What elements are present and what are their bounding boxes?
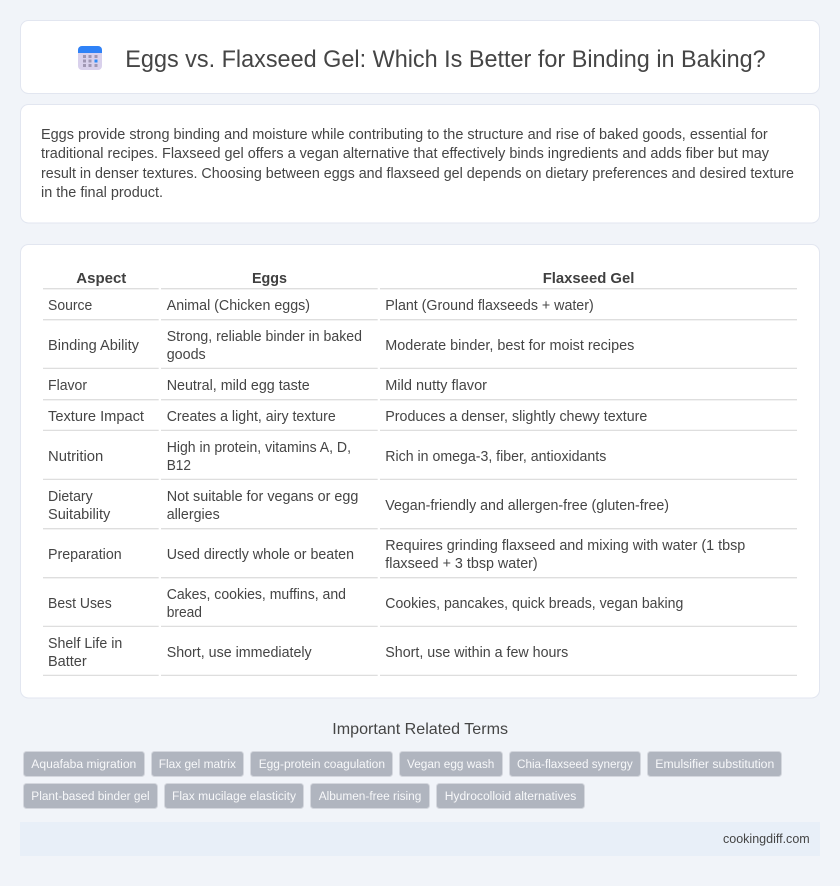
row: binding ability: Strong, reliable binder in baked — [167, 329, 362, 345]
chip: aquafaba migration — [24, 752, 144, 776]
row: flavor: Mild nutty flavor — [385, 378, 487, 394]
chip: flax mucilage elasticity: Flax mucilage elasticity — [172, 789, 297, 803]
text block: introduction paragraph: traditional recipes. Flaxseed gel offers a vegan alternative that effectively binds ingredients and adds fiber but may — [41, 146, 770, 162]
row: nutrition: B12 — [167, 458, 191, 474]
panel: related term chips — [24, 752, 782, 808]
chip: flax gel matrix — [152, 752, 244, 776]
row: binding ability: Binding Ability — [48, 338, 140, 354]
row: source: Animal (Chicken eggs) — [167, 298, 310, 314]
row: dietary suitability: Not suitable for vegans or egg — [167, 489, 358, 505]
row: source: Source — [48, 298, 92, 314]
row: best uses — [48, 587, 683, 621]
row: shelf life in batter: Batter — [48, 654, 87, 670]
title: Eggs vs. Flaxseed Gel: Which Is Better for Binding in Baking? — [125, 46, 766, 73]
row: best uses: Cookies, pancakes, quick breads, vegan baking — [385, 596, 683, 612]
row: source: Plant (Ground flaxseeds + water) — [385, 298, 594, 314]
heading: important related terms: Important Related Terms — [332, 721, 508, 738]
row: source — [48, 298, 594, 314]
table header row — [76, 270, 634, 287]
chip: plant-based binder gel: Plant-based binder gel — [31, 789, 150, 803]
chip: egg-protein coagulation: Egg-protein coagulation — [259, 757, 385, 771]
chip: flax mucilage elasticity — [164, 784, 304, 808]
row: dietary suitability: allergies — [167, 507, 220, 523]
row: dietary suitability: Suitability — [48, 507, 111, 523]
chip: vegan egg wash: Vegan egg wash — [407, 757, 494, 771]
row: shelf life in batter — [48, 636, 568, 670]
row: texture impact: Texture Impact — [48, 409, 144, 425]
chip: egg-protein coagulation — [250, 752, 392, 776]
footer — [20, 822, 820, 856]
row: shelf life in batter: Short, use immediately — [167, 645, 312, 661]
row: nutrition: Rich in omega-3, fiber, antioxidants — [385, 449, 606, 465]
chip: aquafaba migration: Aquafaba migration — [31, 757, 136, 771]
table header row: Aspect — [76, 270, 126, 287]
row: nutrition — [48, 440, 606, 474]
text block: introduction paragraph: result in denser textures. Choosing between eggs and flaxseed gel depends on dietary preferences and desired texture — [41, 166, 794, 182]
chip: flax gel matrix: Flax gel matrix — [159, 757, 236, 771]
chip: hydrocolloid alternatives — [436, 784, 584, 808]
row: texture impact: Creates a light, airy texture — [167, 409, 336, 425]
row: flavor — [48, 378, 487, 394]
row: binding ability: Moderate binder, best for moist recipes — [385, 338, 634, 354]
chip: albumen-free rising: Albumen-free rising — [319, 789, 421, 803]
row: texture impact: Produces a denser, slightly chewy texture — [385, 409, 647, 425]
row: preparation: Used directly whole or beaten — [167, 547, 354, 563]
row: preparation: Preparation — [48, 547, 122, 563]
row: flavor: Neutral, mild egg taste — [167, 378, 310, 394]
row: dietary suitability: Vegan-friendly and allergen-free (gluten-free) — [385, 498, 669, 514]
chip: chia-flaxseed synergy: Chia-flaxseed synergy — [517, 757, 634, 771]
chip: vegan egg wash — [400, 752, 502, 776]
table header row: Flaxseed Gel — [543, 270, 634, 287]
chip: emulsifier substitution: Emulsifier substitution — [655, 757, 774, 771]
row: preparation — [48, 538, 745, 572]
row: shelf life in batter: Short, use within a few hours — [385, 645, 568, 661]
row: preparation: flaxseed + 3 tbsp water) — [385, 556, 538, 572]
chip: plant-based binder gel — [24, 784, 158, 808]
row: flavor: Flavor — [48, 378, 87, 394]
row: binding ability — [48, 329, 634, 363]
row: best uses: bread — [167, 605, 202, 621]
chip: emulsifier substitution — [648, 752, 782, 776]
chip: hydrocolloid alternatives: Hydrocolloid alternatives — [445, 789, 576, 803]
row: nutrition: High in protein, vitamins A, D, — [167, 440, 351, 456]
text block: introduction paragraph: in the final product. — [41, 185, 163, 201]
table header row: Eggs — [252, 270, 287, 287]
chip: albumen-free rising — [310, 784, 430, 808]
row: best uses: Cakes, cookies, muffins, and — [167, 587, 346, 603]
footer source text: cookingdiff.com — [723, 831, 810, 846]
chip: chia-flaxseed synergy — [510, 752, 640, 776]
text block: introduction paragraph — [41, 127, 794, 201]
panel: introduction — [20, 104, 820, 223]
row: shelf life in batter: Shelf Life in — [48, 636, 122, 652]
row: texture impact — [48, 409, 647, 425]
panel: comparison table — [20, 244, 820, 698]
row: dietary suitability: Dietary — [48, 489, 93, 505]
row: binding ability: goods — [167, 347, 206, 363]
row: dietary suitability — [48, 489, 669, 523]
text block: introduction paragraph: Eggs provide strong binding and moisture while contributing to the structure and rise of baked goods, essential for — [41, 127, 768, 143]
row: best uses: Best Uses — [48, 596, 112, 612]
panel: title card — [20, 20, 820, 94]
row: nutrition: Nutrition — [48, 449, 103, 465]
row: preparation: Requires grinding flaxseed and mixing with water (1 tbsp — [385, 538, 745, 554]
icon: calendar — [78, 46, 102, 70]
